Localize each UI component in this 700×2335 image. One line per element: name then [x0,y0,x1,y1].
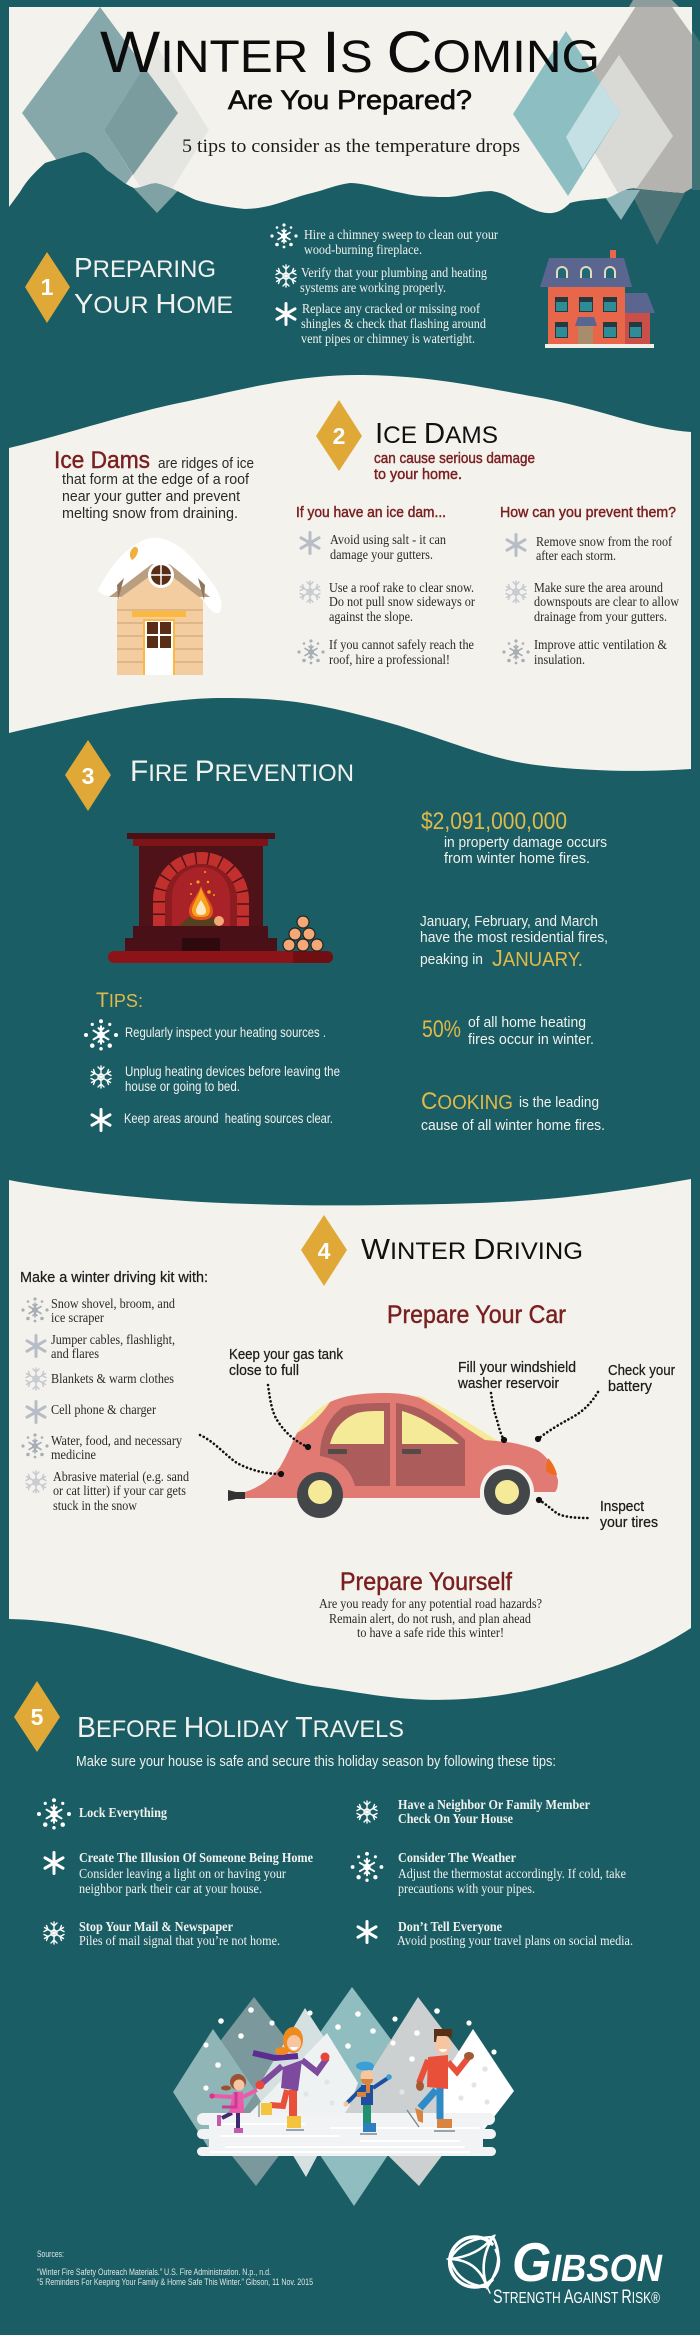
kit item: cables: and flares [51,1346,99,1361]
tip: hire a professional: roof, hire a professional! [329,652,450,667]
tip: plumbing: systems are working properly. [300,280,446,295]
arrow: gas tank [268,1385,310,1449]
tip: chimney sweep [304,227,498,257]
tip: weather: precautions with your pipes. [398,1881,535,1896]
stat: property damage: $2,091,000,000 [421,808,567,835]
tip: roof: Replace any cracked or missing roof [302,301,480,316]
icon: snowflake [26,1471,46,1493]
kit item: blankets: Blankets & warm clothes [51,1371,174,1386]
icon: snowflake [276,265,296,287]
ice dams definition: are ridges of ice [158,455,254,472]
sources: “5 Reminders For Keeping Your Family & Home Safe This Winter.” Gibson, 11 Nov. 2015 [37,2277,313,2287]
icon: fireplace [108,833,333,963]
figure: father [407,2029,474,2131]
kit item: abrasive: Abrasive material (e.g. sand [53,1469,189,1484]
stat: cooking [421,1088,605,1134]
tip: unplug devices [125,1063,340,1094]
tip: downspouts: Make sure the area around [534,580,663,595]
mountains [173,1987,514,2206]
illustration: family ice skating [173,1987,514,2206]
ice dams definition: that form at the edge of a roof [62,471,250,488]
car label: washer [457,1359,576,1392]
icon: snowflake [21,1433,49,1458]
tip: illusion [79,1850,313,1896]
stat: cooking: is the leading [519,1094,599,1111]
kit item: abrasive [53,1469,189,1513]
section 1: preparing your home [25,223,655,348]
tip: roof rake: against the slope. [329,609,413,624]
stat: cooking: COOKING [421,1088,513,1115]
arrow: exhaust [200,1435,283,1476]
tip: illusion: Consider leaving a light on or having your [79,1866,286,1881]
tip: attic ventilation: insulation. [534,652,585,667]
stat: property damage [421,808,607,867]
icon: snowflake [277,304,295,324]
tip: avoid salt: Avoid using salt - it can [330,532,446,547]
tip: chimney sweep: Hire a chimney sweep to clean out your [304,227,498,242]
icon: snowflake [26,1368,46,1390]
arrow: battery [536,1392,598,1441]
arrow: washer [491,1393,506,1442]
stat: peak month: January, February, and March [420,913,598,930]
tip: neighbor: Check On Your House [398,1811,513,1826]
tip: hire a professional [329,637,474,667]
stat: peak month: JANUARY. [492,945,583,971]
kit item: water: Water, food, and necessary [51,1433,182,1448]
badge 1 [25,252,70,323]
subheading: to your home. [374,466,462,483]
text: prepare yourself: Remain alert, do not rush, and plan ahead [329,1611,531,1626]
tip: unplug devices: house or going to bed. [125,1078,240,1094]
tip: mail [79,1919,280,1948]
header diamonds on paper [22,7,692,196]
tip: roof: vent pipes or chimney is watertight. [301,331,475,346]
car label: battery [608,1362,675,1395]
icon: snowflake [44,1922,64,1944]
icon: snowflake [37,1798,71,1830]
icon: snowflake [506,581,526,603]
sources: “Winter Fire Safety Outreach Materials.” U.S. Fire Administration. N.p., n.d. [37,2267,271,2277]
kit item: abrasive: stuck in the snow [53,1498,137,1513]
icon: snowflake [507,534,525,556]
tip: hire a professional: If you cannot safely reach the [329,637,474,652]
badge 3 [65,740,111,811]
tip: roof rake: Do not pull snow sideways or [329,594,475,609]
icon: snowflake [21,1297,49,1322]
ice dams definition: Ice Dams [54,447,150,474]
icon: snowflake [301,532,319,554]
icon: snowflake [300,581,320,603]
icon: snowflake [27,1336,45,1356]
text: prepare yourself: Are you ready for any potential road hazards? [319,1596,542,1611]
stat: property damage: in property damage occurs [444,834,607,851]
icon: snowflake [297,639,325,664]
kit item: cables [51,1332,175,1361]
tip: lock everything: Lock Everything [79,1805,167,1820]
wordmark: GIBSON [512,2231,663,2293]
car label: tires: your tires [600,1514,658,1531]
icon: snowflake [45,1852,63,1874]
icon: snowflake [92,1110,110,1130]
tip: weather: Adjust the thermostat accordingly. If cold, take [398,1866,626,1881]
icon: snowy cottage [98,538,222,675]
kit item: shovel [51,1296,175,1325]
figure: mother [253,2027,330,2130]
heading: driving kit: Make a winter driving kit with: [20,1269,208,1286]
panel: ice dams paper [9,375,691,771]
badge 5: 5 [31,1704,44,1730]
stat: cooking: cause of all winter home fires. [421,1117,605,1134]
car label: gas tank [229,1346,343,1379]
icon: snowflake [351,1852,383,1882]
heading: prepare yourself: Prepare Yourself [340,1568,512,1596]
ice dams definition: melting snow from draining. [62,505,238,522]
tips heading: TIPS: [96,989,143,1012]
car label: tires [600,1498,658,1531]
car label: tires: Inspect [600,1498,645,1515]
tip: plumbing [300,265,487,295]
icon: snowflake [27,1402,45,1422]
ice dams definition: near your gutter and prevent [62,488,241,505]
subheading: can cause serious damage [374,450,535,467]
heading: how can you prevent them: How can you prevent them? [500,504,676,521]
icon: snowflake [84,1019,118,1050]
stat: peak month: peaking in [420,951,483,968]
logo: gibson [447,2231,663,2308]
tip: inspect heating: Regularly inspect your heating sources . [125,1024,326,1040]
tip: weather [398,1850,626,1896]
ice dams definition [54,447,254,522]
badge 5 [14,1681,60,1752]
icon: car [228,1393,558,1520]
tip: clear areas: Keep areas around heating sources clear. [124,1110,333,1126]
tip: mail: Piles of mail signal that you’re not home. [79,1933,280,1948]
tip: roof rake: Use a roof rake to clear snow. [329,580,474,595]
badge 2: 2 [333,423,345,449]
badge 4 [301,1215,347,1286]
tip: weather: Consider The Weather [398,1850,516,1865]
icon: snowflake [357,1801,377,1823]
tip: chimney sweep: wood-burning fireplace. [304,242,422,257]
tip: neighbor [398,1797,590,1826]
heading: winter driving: WINTER DRIVING [361,1234,583,1266]
header diamonds over teal [124,0,700,245]
kit item: shovel: ice scraper [51,1310,104,1325]
car label: washer: washer reservoir [457,1375,559,1392]
tagline: 5 tips to consider as the temperature drops [182,136,520,157]
section 3: fire prevention [65,740,608,1134]
tip: downspouts: drainage from your gutters. [534,609,667,624]
tip: illusion: neighbor park their car at your house. [79,1881,262,1896]
tip: attic ventilation: Improve attic ventilation & [534,637,667,652]
tip: avoid salt [330,532,446,562]
heading: before holiday travels: BEFORE HOLIDAY TRAVELS [77,1712,404,1744]
badge 1: 1 [41,274,54,300]
title: WINTER IS COMING [100,20,600,85]
heading: preparing your home: YOUR HOME [74,288,233,319]
panel: header paper [9,7,692,213]
subtitle: Are You Prepared? [228,85,472,115]
heading: if you have an ice dam: If you have an ice dam... [296,504,446,521]
stat: property damage: from winter home fires. [444,850,590,867]
tip: unplug devices: Unplug heating devices before leaving the [125,1063,340,1079]
tip: roof rake [329,580,475,624]
tip: neighbor: Have a Neighbor Or Family Member [398,1797,590,1812]
tip: illusion: Create The Illusion Of Someone Being Home [79,1850,313,1865]
icon: snowflake [91,1066,111,1088]
heading: prepare your car: Prepare Your Car [387,1301,566,1329]
subheading [374,450,535,483]
tip: roof [301,301,486,346]
heading: preparing your home: PREPARING [74,252,216,283]
tip: downspouts: downspouts are clear to allow [534,594,679,609]
tip: roof: shingles & check that flashing around [301,316,486,331]
tip: plumbing: Verify that your plumbing and heating [301,265,487,280]
intro text: Make sure your house is safe and secure this holiday season by following these tips: [76,1753,556,1770]
tip: social media [397,1919,633,1948]
stat: 50 percent [422,1014,594,1048]
tagline: STRENGTH AGAINST RISK® [493,2287,660,2308]
stat: peak month [420,913,608,971]
figure: boy [343,2062,392,2134]
sources: Sources: [37,2249,64,2259]
ice rink [197,2113,496,2156]
tip: avoid salt: damage your gutters. [330,547,433,562]
badge 4: 4 [318,1238,331,1264]
figure: girl [209,2074,257,2133]
car label: battery: Check your [608,1362,675,1379]
icon: gibson emblem [447,2235,499,2293]
icon: snowflake [502,639,530,664]
tip: remove snow: Remove snow from the roof [536,534,672,549]
section 5: before holiday travels [14,1681,633,1948]
arrow: tires [537,1498,591,1518]
section 4: winter driving [20,1215,675,1640]
kit item: cables: Jumper cables, flashlight, [51,1332,175,1347]
stat: 50 percent: of all home heating [468,1014,586,1031]
car label: battery: battery [608,1378,652,1395]
heading: fire prevention: FIRE PREVENTION [130,755,354,788]
badge 3: 3 [82,763,94,789]
heading: ice dams: ICE DAMS [375,418,498,450]
tip: remove snow [536,534,672,563]
icon: snowflake [358,1922,376,1942]
tip: downspouts [534,580,679,624]
car label: washer: Fill your windshield [458,1359,576,1376]
stat: 50 percent: 50% [422,1016,461,1043]
tip: social media: Avoid posting your travel plans on social media. [397,1933,633,1948]
text: prepare yourself: to have a safe ride this winter! [357,1625,504,1640]
sources [37,2249,313,2287]
kit item: shovel: Snow shovel, broom, and [51,1296,175,1311]
kit item: abrasive: or cat litter) if your car gets [53,1483,186,1498]
kit item: water [51,1433,182,1462]
kit item: water: medicine [51,1447,96,1462]
stat: peak month: have the most residential fires, [420,929,608,946]
stat: 50 percent: fires occur in winter. [468,1031,594,1048]
icon: snowflake [270,223,298,248]
kit item: phone: Cell phone & charger [51,1402,156,1417]
car label: gas tank: close to full [229,1362,299,1379]
car label: gas tank: Keep your gas tank [229,1346,343,1363]
tip: mail: Stop Your Mail & Newspaper [79,1919,233,1934]
badge 2 [316,400,362,471]
icon: brick house [540,250,655,348]
panel: winter driving paper [9,1179,691,1700]
tip: attic ventilation [534,637,667,667]
snow dots [203,2007,497,2091]
tip: social media: Don’t Tell Everyone [398,1919,502,1934]
text: prepare yourself [319,1596,542,1640]
section 2: ice dams [54,400,679,675]
heading: preparing your home [74,252,233,319]
tip: remove snow: after each storm. [536,548,616,563]
